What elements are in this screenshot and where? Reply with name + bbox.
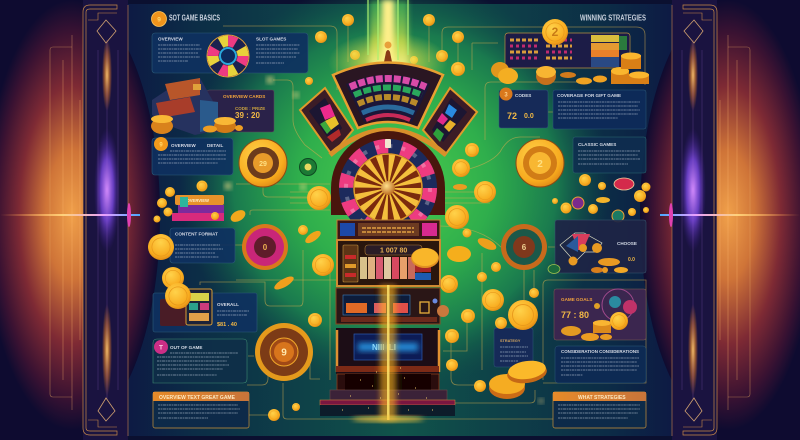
wheel arch <box>330 130 446 155</box>
icon: tablet with coins <box>160 267 212 326</box>
machine top ornament <box>384 42 392 62</box>
panel: coverage for gift game: COVERAGE FOR GIFT GAME <box>557 93 621 98</box>
scattered gold coins <box>268 14 548 421</box>
right side screen <box>423 88 477 155</box>
right decorative side column <box>640 0 800 440</box>
dial: gold 2 right <box>516 139 564 187</box>
icon: prize wheel <box>207 35 249 77</box>
panel: out of game <box>153 339 247 383</box>
panel: codes: 3 <box>504 92 508 98</box>
left side screen <box>300 88 353 155</box>
heading: slot game basics: SOT GAME BASICS <box>169 14 220 22</box>
icon: colour stacks with coins: 7 OVERVIEW <box>183 198 209 203</box>
cabinet base <box>337 374 439 390</box>
slot machine <box>300 42 477 416</box>
panel: tablet overall: OVERALL <box>217 302 239 307</box>
panel: diagram with choose values: 0.0 <box>628 257 635 263</box>
panel: overview detail: DETAIL <box>207 143 223 148</box>
circuit connector lines <box>200 26 646 419</box>
strategy board <box>505 19 630 68</box>
light beam top <box>328 0 448 92</box>
neon display cabinet: NIII ILI <box>372 343 396 352</box>
left decorative side column <box>0 0 160 440</box>
reels cabinet: 1 007 80 <box>380 248 407 254</box>
panel: codes: 0.0 <box>524 113 534 120</box>
panel: tablet overall: $81 . 40 <box>217 322 237 328</box>
panel: tablet overall <box>153 267 257 332</box>
dial: gold 29 <box>239 139 287 187</box>
panel: overview and slot games: SLOT GAMES <box>256 36 286 42</box>
panel: overview and slot games <box>152 33 308 77</box>
glow sparkles <box>225 77 543 403</box>
panel: overview and slot games: OVERVIEW <box>158 36 183 42</box>
panel: out of game: OUT OF GAME <box>170 345 202 350</box>
reels cabinet <box>337 240 440 286</box>
panel: overview cards with value <box>151 78 274 135</box>
panel: classic games <box>573 137 646 173</box>
panel: strategy note <box>494 328 533 367</box>
panel: out of game: T <box>159 344 163 352</box>
panel: content format: CONTENT FORMAT <box>175 232 218 236</box>
panel: consideration text: CONSIDERATION CONSIDERATIONS <box>561 349 639 354</box>
panel: overview cards with value: CODE : PRIZE <box>235 106 265 111</box>
panel: diagram with choose values: CHOOSE <box>617 241 637 246</box>
panel: overview cards with value: OVERVIEW CARDS <box>223 94 265 99</box>
strategy board: 2 <box>552 25 559 39</box>
machine steps <box>320 390 455 416</box>
dial: green and brown 6: 6 <box>522 243 527 252</box>
panel: overview detail: 9 <box>159 142 163 148</box>
panel: overview text game <box>153 392 249 428</box>
dial: magenta 0: 0 <box>263 243 268 252</box>
icon: stacked game boxes <box>151 78 243 135</box>
icon: casino chips and coins cluster <box>552 174 650 222</box>
panel: strategy note: STRATEGY <box>500 339 521 343</box>
dial: bronze 9 <box>255 323 313 381</box>
dial: green and brown 6 <box>501 224 547 270</box>
floating coin over machine <box>411 248 439 268</box>
icon: colour stacks with coins <box>154 180 247 224</box>
neon display cabinet <box>336 328 439 374</box>
panel: overview cards with value: 39 : 20 <box>235 111 260 120</box>
panel: classic games: CLASSIC GAMES <box>578 142 616 147</box>
lower display cabinet <box>336 288 449 324</box>
dial: gold 29: 29 <box>259 161 267 168</box>
icon: chips and coins <box>561 289 637 341</box>
panel: diagram with choose values <box>555 220 646 273</box>
panel: overview text game: OVERVIEW TEXT GREAT GAME <box>159 395 236 401</box>
icon: small green poker chips <box>300 158 560 274</box>
panel: content format <box>143 228 235 265</box>
panel: codes: CODES <box>515 93 531 98</box>
panel: game goals with value <box>554 289 646 341</box>
panel: codes: 72 <box>507 111 517 121</box>
panel: overview detail <box>152 137 233 175</box>
glitter sparkles at machine base <box>342 368 433 410</box>
coin pile under strategy board <box>491 52 649 85</box>
panel: what strategies: WHAT STRATEGIES <box>578 395 626 401</box>
panel: consideration text <box>555 346 646 383</box>
panel: coverage for gift game <box>553 90 646 129</box>
panel: game goals with value: GAME GOALS <box>561 297 592 302</box>
panel: overview detail: OVERVIEW <box>171 143 196 148</box>
golden light beam <box>352 285 424 422</box>
dial: magenta 0 <box>242 224 288 270</box>
heading: slot game basics <box>152 12 220 26</box>
main wheel <box>331 131 445 237</box>
main top screen <box>333 62 443 128</box>
reel header bar <box>337 220 440 240</box>
panel: game goals with value: 77 : 80 <box>561 310 589 320</box>
dial: gold 2 right: 2 <box>537 159 543 170</box>
dial: bronze 9: 9 <box>281 348 287 358</box>
heading: winning strategies: WINNING STRATEGIES <box>580 14 646 22</box>
heading: slot game basics: 9 <box>157 16 161 24</box>
panel: what strategies <box>553 392 646 428</box>
panel: codes <box>499 88 548 128</box>
